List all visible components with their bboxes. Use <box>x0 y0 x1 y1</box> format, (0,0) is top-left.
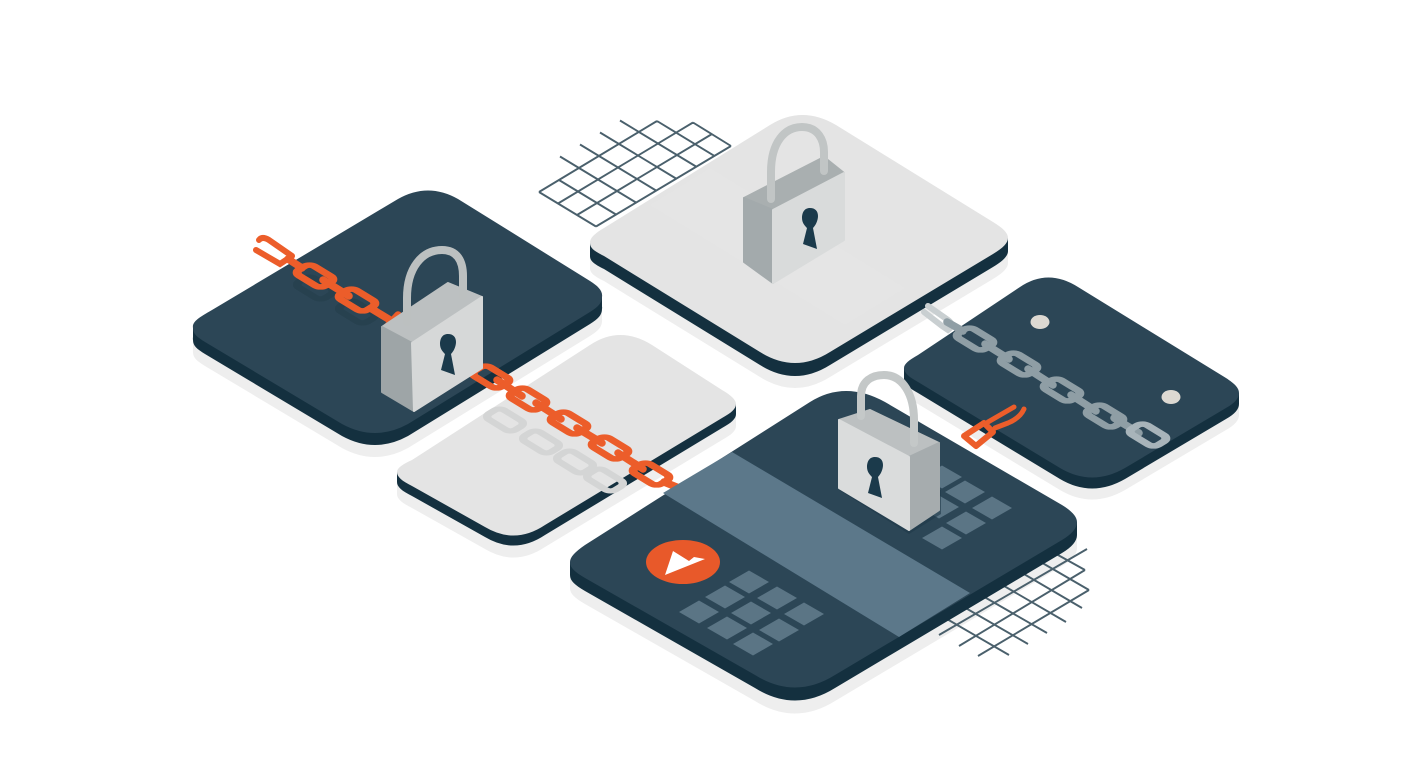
shadow of large platform <box>570 417 1077 714</box>
keyhole <box>440 334 456 375</box>
padlock: bottom <box>839 375 941 534</box>
rivet: lower <box>1162 390 1180 404</box>
shackle <box>861 375 914 443</box>
panel: top light platform <box>590 115 1008 388</box>
body left side <box>744 198 773 283</box>
small broken orange chain link <box>964 407 1024 446</box>
body front <box>773 173 844 283</box>
chain links left of padlock <box>288 259 395 323</box>
body top <box>382 283 482 343</box>
padlock: top <box>744 127 844 283</box>
keyhole <box>867 457 883 498</box>
play badge <box>646 540 720 584</box>
body right side <box>909 443 939 530</box>
panel: middle light platform <box>397 335 736 558</box>
wire grid: top left <box>539 120 731 226</box>
orange chain <box>256 238 684 490</box>
light band <box>663 452 970 637</box>
keypad: upper right <box>919 466 1012 550</box>
shackle <box>771 127 824 199</box>
body front <box>412 297 482 411</box>
chain links right of padlock <box>497 380 684 490</box>
contact shadow <box>839 490 941 534</box>
panel: right dark platform <box>904 278 1239 500</box>
body top <box>744 157 844 210</box>
keypad: lower left <box>679 570 824 656</box>
wire grid: bottom right <box>939 545 1089 656</box>
body left side <box>382 327 414 411</box>
padlock: left <box>382 250 482 411</box>
rivet: upper <box>1030 315 1050 329</box>
body top <box>839 410 939 457</box>
shackle <box>407 250 463 322</box>
grey chain on right platform <box>924 306 1169 448</box>
broken open end <box>256 238 292 264</box>
panel: large dark platform <box>570 391 1077 700</box>
ghost chain on light platform <box>484 407 626 493</box>
chain shadow on left platform <box>294 275 378 325</box>
body front <box>839 420 909 530</box>
panel: left dark platform <box>193 190 602 457</box>
keyhole <box>802 208 818 249</box>
